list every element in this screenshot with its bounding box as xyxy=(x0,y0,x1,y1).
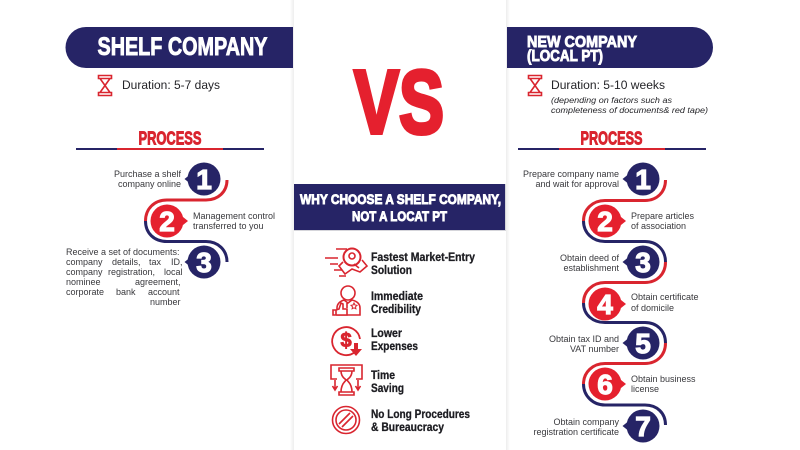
step 2 xyxy=(150,204,275,238)
step 6: Obtain business xyxy=(631,374,696,384)
step 3: details, xyxy=(112,257,141,267)
panel: shelf company header: SHELF COMPANY xyxy=(98,33,268,61)
chart: left process steps xyxy=(66,162,275,307)
step 3: account xyxy=(148,287,180,297)
text: right duration: Duration: 5-10 weeks xyxy=(551,78,665,92)
text: right duration xyxy=(551,78,708,115)
step 3: tax xyxy=(149,257,162,267)
benefit: immediate credibility xyxy=(333,286,423,316)
benefit: lower expenses: Expenses xyxy=(371,339,418,353)
benefit: immediate credibility: Immediate xyxy=(371,289,423,303)
step 4: of domicile xyxy=(631,303,674,313)
step 7 xyxy=(533,410,660,442)
icon: dollar with down arrow: $ xyxy=(340,330,352,352)
step 3 xyxy=(560,246,660,278)
step 7: Obtain company xyxy=(553,417,619,427)
icon: prohibition sign xyxy=(332,406,360,434)
step 1: 1 xyxy=(635,164,651,195)
step 3: registration, xyxy=(108,267,155,277)
benefit: lower expenses xyxy=(332,326,418,356)
step 3: company xyxy=(66,267,103,277)
step 2: 2 xyxy=(597,206,613,237)
step 6: license xyxy=(631,384,659,394)
connector: left wave xyxy=(146,180,227,262)
panel: new company header: (LOCAL PT) xyxy=(527,48,603,65)
benefit: fastest market-entry: Fastest Market-Entry xyxy=(371,250,475,264)
step 3: local xyxy=(164,267,183,277)
step 3: company xyxy=(66,257,103,267)
step 1: Prepare company name xyxy=(523,169,619,179)
step 3: agreement, xyxy=(135,277,181,287)
text: right duration: completeness of documents& red tape) xyxy=(551,105,708,115)
benefit: fastest market-entry xyxy=(325,248,475,277)
step 3: nominee xyxy=(66,277,101,287)
step 3: ID, xyxy=(171,257,183,267)
step 3: bank xyxy=(116,287,136,297)
step 1 xyxy=(523,162,660,196)
step 5: VAT number xyxy=(570,344,619,354)
title: VS: VS xyxy=(354,53,444,153)
heading: right process: PROCESS xyxy=(580,128,642,148)
step 5: Obtain tax ID and xyxy=(549,334,619,344)
panel: shelf company header xyxy=(66,27,293,68)
benefit: time saving: Saving xyxy=(371,381,404,395)
step 2: Prepare articles xyxy=(631,211,695,221)
benefit: immediate credibility: Credibility xyxy=(371,302,421,316)
step 4: 4 xyxy=(597,289,613,320)
benefit: lower expenses: Lower xyxy=(371,326,402,340)
icon: person with thumbs up xyxy=(333,286,360,315)
icon: right hourglass xyxy=(528,76,542,96)
heading: left process: PROCESS xyxy=(138,128,202,148)
step 3: 3 xyxy=(635,247,651,278)
step 1: Purchase a shelf xyxy=(114,169,181,179)
benefit: no long procedures: No Long Procedures xyxy=(371,407,470,421)
connector: right wave xyxy=(584,180,666,425)
step 6 xyxy=(588,368,696,400)
step 1: 1 xyxy=(196,164,212,195)
benefit: time saving xyxy=(331,365,404,395)
step 3: 3 xyxy=(196,247,212,278)
step 4: Obtain certificate xyxy=(631,292,699,302)
chart: right process steps xyxy=(523,162,699,442)
step 3: Receive a set of documents: xyxy=(66,247,180,257)
benefit: no long procedures: & Bureaucracy xyxy=(371,420,444,434)
step 2: 2 xyxy=(159,206,175,237)
step 4 xyxy=(588,288,699,320)
icon: speeding handshake badge xyxy=(325,248,367,276)
step 2 xyxy=(588,204,695,238)
banner: why choose: NOT A LOCAT PT xyxy=(352,208,447,224)
text: right duration: (depending on factors such as xyxy=(551,95,673,105)
step 7: registration certificate xyxy=(533,427,619,437)
step 1: and wait for approval xyxy=(535,179,619,189)
step 2: of association xyxy=(631,221,686,231)
icon: left hourglass xyxy=(98,76,112,96)
panel: centre column xyxy=(290,0,510,450)
panel: new company header: NEW COMPANY xyxy=(527,34,637,51)
step 5: 5 xyxy=(635,328,651,359)
step 2: transferred to you xyxy=(193,221,264,231)
icon: hourglass and money xyxy=(331,365,362,395)
benefit: fastest market-entry: Solution xyxy=(371,263,412,277)
panel: new company header xyxy=(507,27,713,68)
step 3 xyxy=(66,246,220,307)
step 3: corporate xyxy=(66,287,104,297)
step 1 xyxy=(114,162,220,196)
text: left duration: Duration: 5-7 days xyxy=(122,78,220,92)
benefit: time saving: Time xyxy=(371,368,395,382)
step 1: company online xyxy=(118,179,181,189)
step 5 xyxy=(549,326,660,360)
step 6: 6 xyxy=(597,369,613,400)
banner: why choose: WHY CHOOSE A SHELF COMPANY, xyxy=(300,191,501,207)
step 7: 7 xyxy=(635,411,651,442)
step 3: number xyxy=(150,297,181,307)
step 2: Management control xyxy=(193,211,275,221)
benefit: no long procedures xyxy=(332,406,470,434)
step 3: Obtain deed of xyxy=(560,253,619,263)
step 3: establishment xyxy=(563,263,619,273)
banner: why choose xyxy=(294,184,506,231)
